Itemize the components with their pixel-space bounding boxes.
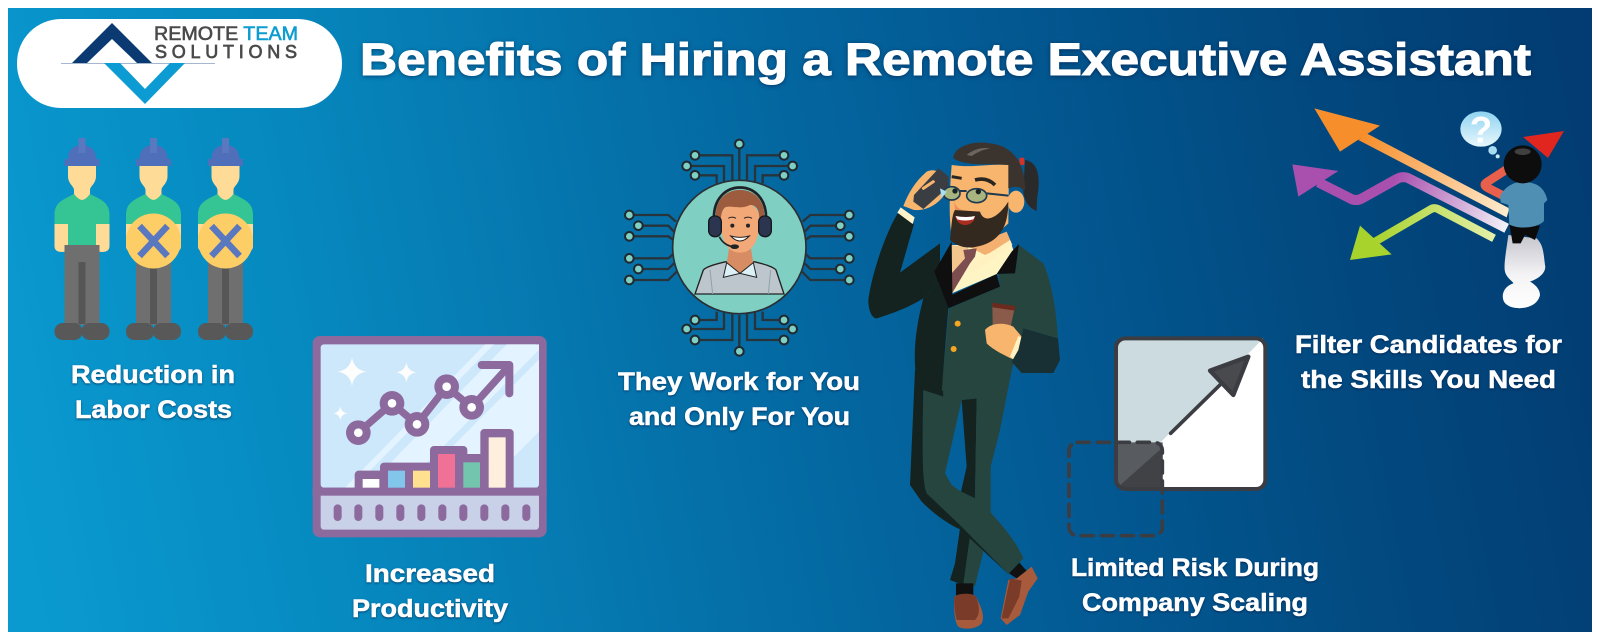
worker one [54,138,110,340]
logo check mark [104,63,185,104]
thought bubble: ? [1470,109,1492,150]
thought bubble [1460,109,1502,158]
icon: support agent in circuit [625,140,854,356]
logo roof mark [72,23,152,63]
arrow: green [1350,208,1494,260]
standing figure [1500,145,1547,243]
label: increased productivity [352,560,508,623]
businessman torso and head [868,142,1060,391]
label: they work for you: and Only For You [629,403,850,431]
standing figure shadow [1503,235,1545,308]
label: they work for you: They Work for You [618,368,860,396]
label: limited risk during company scaling: Company Scaling [1082,589,1308,617]
label: limited risk during company scaling: Limited Risk During [1071,554,1319,582]
worker three crossed [198,138,253,340]
label: reduction in labor costs: Labor Costs [75,396,232,424]
label: increased productivity: Productivity [352,595,508,623]
icon: scaling square with arrow [1069,338,1265,536]
logo wordmark second line: SOLUTIONS [155,42,297,62]
label: they work for you [618,368,860,431]
label: filter candidates: Filter Candidates for [1295,331,1562,359]
label: reduction in labor costs: Reduction in [71,361,235,389]
icon: productivity chart [313,336,547,537]
title: Benefits of Hiring a Remote Executive Assistant [360,34,1531,85]
illustration: businessman on phone with coffee [868,142,1060,629]
label: filter candidates: the Skills You Need [1301,366,1556,394]
logo: Remote Team Solutions [17,19,342,108]
logo wordmark: REMOTE TEAM [154,24,298,45]
icon: person choosing between arrows [1292,108,1564,308]
worker two crossed [126,138,181,340]
businessman legs and shoes [910,370,1038,629]
circuit traces [629,144,849,351]
arrow: red [1485,131,1564,197]
arrow: purple [1292,164,1507,228]
label: increased productivity: Increased [365,560,495,588]
circuit pads [625,140,854,356]
arrow: orange [1314,108,1509,217]
label: filter candidates [1295,331,1562,394]
label: reduction in labor costs [71,361,235,424]
label: limited risk during company scaling [1071,554,1319,617]
icon: three workers, two crossed out [54,138,253,340]
